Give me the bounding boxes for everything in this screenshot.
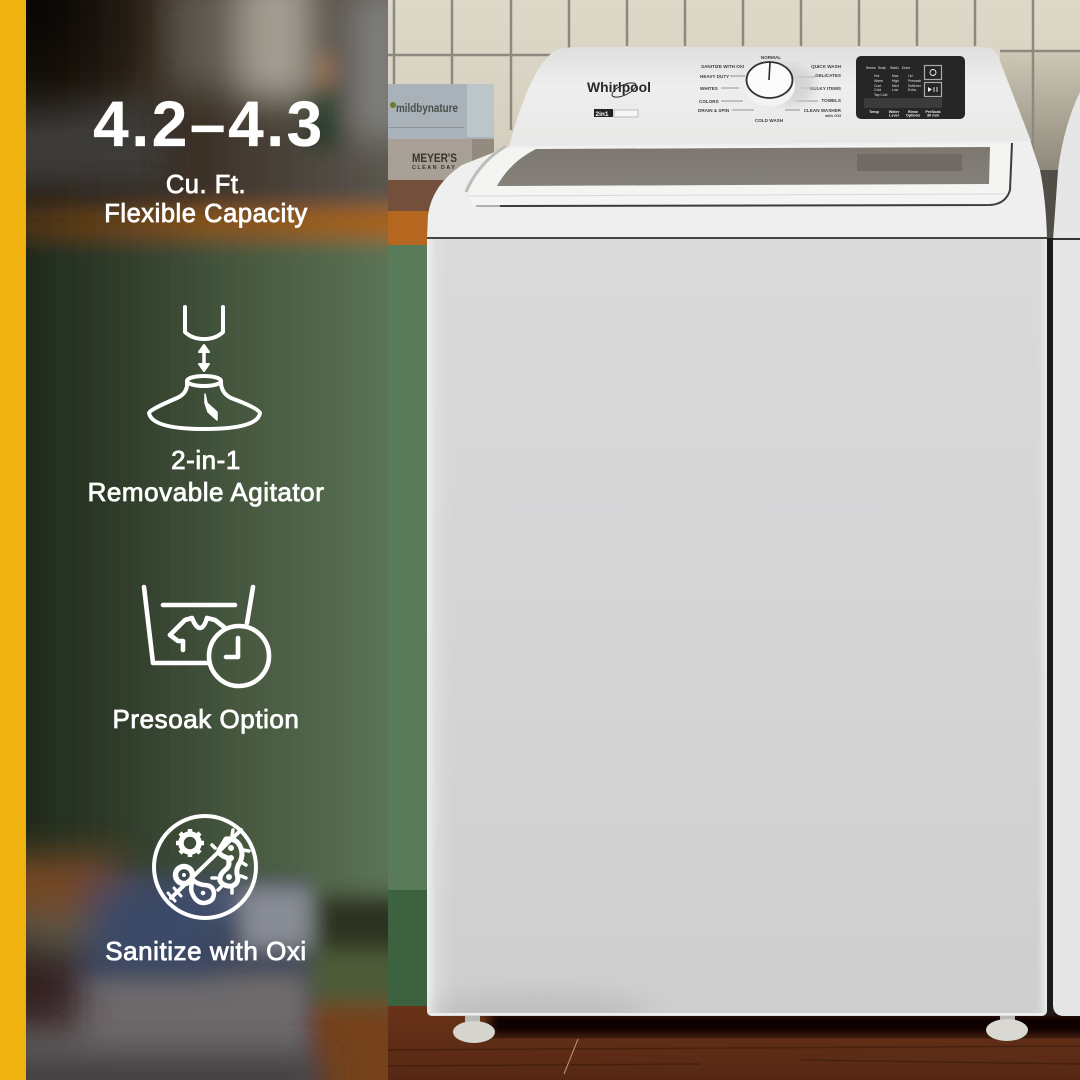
washer: control console: Soak [878, 66, 886, 70]
washer: top deck and lid [427, 140, 1047, 239]
cycle labels: DRAIN & SPIN [698, 108, 730, 113]
washer: control console: Lid [908, 74, 913, 78]
text: sanitize label: Sanitize with Oxi [105, 936, 307, 966]
washer: control console: Prewash [908, 79, 921, 83]
cycle labels: DELICATES [815, 73, 841, 78]
washer: control console: 30 min [927, 114, 940, 118]
washer: control console: Max [892, 74, 899, 78]
washer: control console: Temp [869, 110, 880, 114]
cycle labels: CLEAN WASHER [804, 108, 842, 113]
text: presoak label: Presoak Option [113, 704, 299, 734]
background: blurred room [26, 0, 388, 1080]
cycle labels: NORMAL [761, 55, 781, 60]
tile wall [388, 0, 1080, 240]
cycle labels: with OXI [824, 113, 841, 118]
washer: control console: Tap Cold [874, 93, 887, 97]
cycle labels: QUICK WASH [811, 64, 842, 69]
cycle labels: SANITIZE WITH OXI [701, 64, 744, 69]
text: agitator label: Removable Agitator [88, 477, 324, 507]
icon: presoak tub and clock [142, 584, 272, 688]
washer: control console: Water [889, 110, 900, 114]
washer: control console: Sense [866, 66, 876, 70]
text: agitator label [88, 445, 324, 507]
counter and product boxes: CLEAN DAY [412, 165, 456, 171]
washer: control console: Wash [890, 66, 899, 70]
counter and product boxes [388, 84, 494, 245]
cycle labels [698, 55, 842, 123]
washer: control console: Low [892, 88, 899, 92]
wood floor [388, 1006, 1080, 1080]
dial [766, 65, 814, 105]
washer: control console: High [892, 79, 899, 83]
cycle labels: COLD WASH [755, 118, 784, 123]
washer: cabinet body [427, 238, 1047, 1032]
washer: control console: Cold [874, 88, 881, 92]
washer: control console: Softener [908, 84, 922, 88]
washer: control console: PreSoak [925, 110, 941, 114]
washer: control console: Med [892, 84, 899, 88]
panel: blurred left column [26, 0, 388, 1080]
washer: control console: Options [906, 114, 920, 118]
washer: control console: Rinse [908, 110, 918, 114]
text: capacity label [104, 171, 308, 228]
washer: control console: Warm [874, 79, 883, 83]
adjacent washer edge [1040, 92, 1080, 1016]
cycle labels: BULKY ITEMS [810, 86, 841, 91]
text: capacity label: Cu. Ft. [166, 171, 246, 199]
washer: control console: Done [902, 66, 910, 70]
washer: control console [509, 47, 1031, 146]
counter and product boxes: mildbynature [396, 103, 458, 115]
icon: sanitize germs crossed out [152, 814, 258, 920]
cycle labels: TOWELS [821, 98, 841, 103]
counter and product boxes: MEYER'S [412, 151, 457, 165]
washer: control console: Level [889, 114, 899, 118]
text: capacity label: Flexible Capacity [104, 200, 308, 228]
accent bar [0, 0, 26, 1080]
photo: laundry room with washer [388, 0, 1080, 1080]
washer: leveling feet [453, 1014, 1028, 1043]
washer: control console: Cool [874, 84, 881, 88]
washer: control console: Hot [874, 74, 879, 78]
black control panel [856, 56, 965, 119]
soft colour blobs [0, 0, 410, 1080]
washer: control console: Whirlpool [587, 80, 651, 95]
cycle labels: HEAVY DUTY [700, 74, 729, 79]
cycle labels: COLORS [699, 99, 719, 104]
base layer: wall, shelf band, floor, basket [0, 0, 440, 1080]
cycle labels: WHITES [700, 86, 718, 91]
washer: control console: 2in1 [596, 111, 609, 118]
washer: control console: Extra [908, 88, 916, 92]
heading: capacity: 4.2–4.3 [93, 88, 325, 160]
icon: removable agitator [147, 305, 262, 431]
text: agitator label: 2-in-1 [171, 445, 241, 475]
green cabinet wall [388, 245, 433, 890]
